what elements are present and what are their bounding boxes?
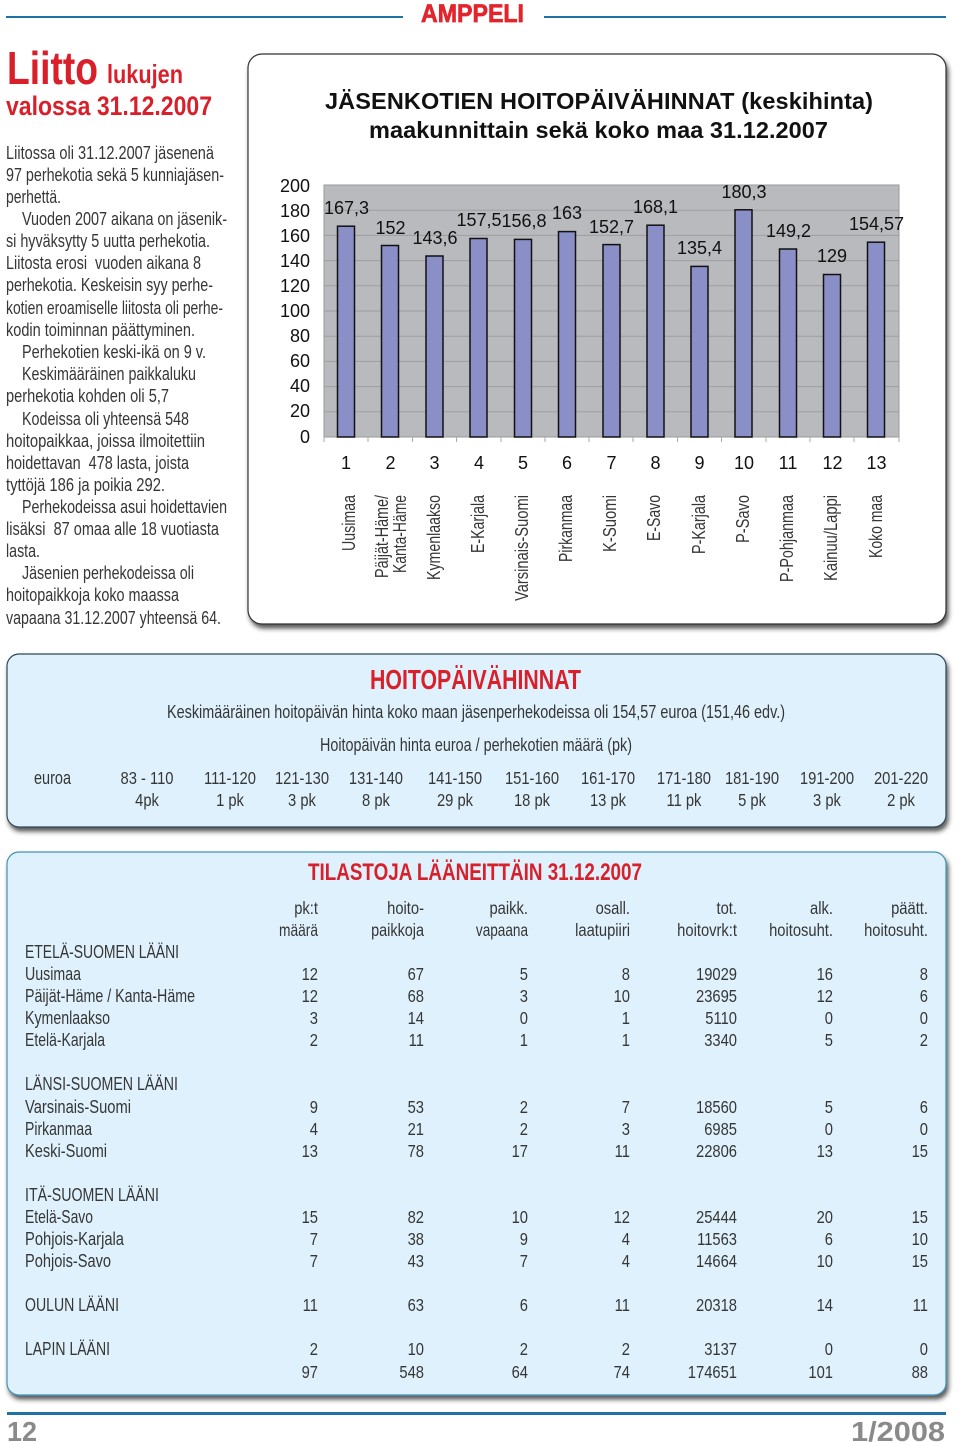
column: päätt. hoitosuht.: päätt. <box>891 899 928 918</box>
category numbers: 7 <box>606 453 617 473</box>
column: pk:t määrä: 4 <box>310 1120 318 1139</box>
column: alk. hoitosuht.: alk. <box>810 899 833 918</box>
column: paikk. vapaana: 6 <box>520 1296 528 1315</box>
column: paikk. vapaana: 7 <box>520 1252 528 1271</box>
region names: E-Savo <box>644 495 664 541</box>
text block: intro column <box>6 143 227 628</box>
column: paikk. vapaana: 5 <box>520 965 528 984</box>
y axis labels: 60 <box>290 351 310 371</box>
column: tot. hoitovrk:t: 14664 <box>696 1252 737 1271</box>
column: hoitopaikkoja: 43 <box>408 1252 424 1271</box>
column: tot. hoitovrk:t: 23695 <box>696 987 737 1006</box>
title: lukujen <box>107 59 183 89</box>
column: hoitopaikkoja: paikkoja <box>371 921 425 940</box>
column: tot. hoitovrk:t: 174651 <box>688 1363 737 1382</box>
column: alk. hoitosuht.: 20 <box>817 1208 833 1227</box>
column: paikk. vapaana: 2 <box>520 1340 528 1359</box>
text block: intro column: Kodeissa oli yhteensä 548 <box>22 409 189 429</box>
column: alk. hoitosuht.: 0 <box>825 1009 833 1028</box>
column: pk:t määrä: 15 <box>302 1208 318 1227</box>
column: alk. hoitosuht.: 13 <box>817 1142 833 1161</box>
column: paikk. vapaana: vapaana <box>476 921 529 940</box>
row labels: Pohjois-Karjala <box>25 1229 125 1249</box>
column: paikk. vapaana: 17 <box>512 1142 528 1161</box>
column: osall. laatupiiri: osall. <box>596 899 630 918</box>
value labels: 149,2 <box>766 221 811 241</box>
text block: intro column: perhekotia. Keskeisin syy perhe- <box>6 275 213 295</box>
price ranges: 4pk <box>135 791 160 810</box>
column: tot. hoitovrk:t: 3340 <box>704 1031 737 1050</box>
column: osall. laatupiiri: 7 <box>622 1098 630 1117</box>
column: hoitopaikkoja: hoito- <box>387 899 424 918</box>
column: päätt. hoitosuht.: 6 <box>920 1098 928 1117</box>
column: hoitopaikkoja: 82 <box>408 1208 424 1227</box>
column: osall. laatupiiri: 2 <box>622 1340 630 1359</box>
value labels: 168,1 <box>633 197 678 217</box>
value labels: 163 <box>552 203 582 223</box>
column: paikk. vapaana: 10 <box>512 1208 528 1227</box>
text block: intro column: Jäsenien perhekodeissa oli <box>22 563 194 583</box>
column: pk:t määrä: 7 <box>310 1230 318 1249</box>
text block: intro column: lisäksi 87 omaa alle 18 vuotiasta <box>6 519 220 539</box>
column: tot. hoitovrk:t: 11563 <box>697 1230 737 1249</box>
column: päätt. hoitosuht.: 6 <box>920 987 928 1006</box>
value labels <box>324 182 904 266</box>
column: alk. hoitosuht.: 5 <box>825 1031 833 1050</box>
text block: intro column: Vuoden 2007 aikana on jäsenik- <box>22 209 227 229</box>
y axis labels: 80 <box>290 326 310 346</box>
column: tot. hoitovrk:t: hoitovrk:t <box>677 921 737 940</box>
category numbers: 2 <box>385 453 396 473</box>
column: päätt. hoitosuht.: 10 <box>912 1230 928 1249</box>
price ranges: 181-190 <box>725 769 779 788</box>
row labels: Etelä-Karjala <box>25 1030 106 1050</box>
column: paikk. vapaana <box>476 899 529 1382</box>
column: osall. laatupiiri: 3 <box>622 1120 630 1139</box>
column: alk. hoitosuht.: 101 <box>808 1363 833 1382</box>
column: hoitopaikkoja: 68 <box>408 987 424 1006</box>
region names: Uusimaa <box>339 494 359 551</box>
price ranges: 13 pk <box>590 791 627 810</box>
category numbers: 4 <box>474 453 484 473</box>
y axis labels <box>280 176 310 447</box>
column: alk. hoitosuht.: 10 <box>817 1252 833 1271</box>
region names: Koko maa <box>866 494 886 558</box>
price ranges: 151-160 <box>505 769 559 788</box>
column: pk:t määrä: 13 <box>302 1142 318 1161</box>
category numbers: 5 <box>518 453 528 473</box>
column: pk:t määrä <box>279 899 319 1382</box>
column: paikk. vapaana: 1 <box>520 1031 528 1050</box>
column: hoitopaikkoja: 10 <box>408 1340 424 1359</box>
column: osall. laatupiiri: 4 <box>622 1252 630 1271</box>
column: tot. hoitovrk:t <box>677 899 737 1382</box>
text block: intro column: Liitosta erosi vuoden aikana 8 <box>6 253 201 273</box>
text block: intro column: perhekotia kohden oli 5,7 <box>6 386 169 406</box>
price ranges: 29 pk <box>437 791 474 810</box>
price ranges: 3 pk <box>288 791 317 810</box>
value labels: 154,57 <box>849 214 904 234</box>
price ranges: 161-170 <box>581 769 635 788</box>
column: alk. hoitosuht.: 0 <box>825 1340 833 1359</box>
y axis labels: 160 <box>280 226 310 246</box>
column: pk:t määrä: 12 <box>302 987 318 1006</box>
price ranges: 3 pk <box>813 791 842 810</box>
row labels: Kymenlaakso <box>25 1008 110 1028</box>
row labels: Etelä-Savo <box>25 1207 93 1227</box>
text block: intro column: hoitopaikkaa, joissa ilmoitettiin <box>6 431 205 451</box>
price ranges: 2 pk <box>887 791 916 810</box>
y axis labels: 20 <box>290 401 310 421</box>
value labels: 152 <box>375 218 406 238</box>
column: hoitopaikkoja: 78 <box>408 1142 424 1161</box>
text block: intro column: kodin toiminnan päättyminen. <box>6 320 195 340</box>
price ranges: 11 pk <box>666 791 702 810</box>
category numbers: 9 <box>694 453 705 473</box>
category numbers <box>341 453 887 473</box>
price ranges: 8 pk <box>362 791 391 810</box>
bar chart <box>280 176 904 601</box>
y axis labels: 200 <box>280 176 310 196</box>
column: paikk. vapaana: 2 <box>520 1120 528 1139</box>
title: valossa 31.12.2007 <box>6 91 212 121</box>
value labels: 152,7 <box>589 217 634 237</box>
panel: chart <box>248 54 946 624</box>
region names: E-Karjala <box>468 494 488 553</box>
column: osall. laatupiiri: 4 <box>622 1230 630 1249</box>
y axis labels: 180 <box>280 201 310 221</box>
column: hoitopaikkoja: 38 <box>408 1230 424 1249</box>
price ranges: 201-220 <box>874 769 928 788</box>
chart title: maakunnittain sekä koko maa 31.12.2007 <box>369 117 828 143</box>
column: osall. laatupiiri: 11 <box>615 1296 630 1315</box>
column: päätt. hoitosuht.: 2 <box>920 1031 928 1050</box>
column: pk:t määrä: 12 <box>302 965 318 984</box>
column: tot. hoitovrk:t: 20318 <box>696 1296 737 1315</box>
column: hoitopaikkoja: 11 <box>409 1031 424 1050</box>
column: alk. hoitosuht.: hoitosuht. <box>769 921 833 940</box>
row labels: ETELÄ-SUOMEN LÄÄNI <box>25 942 179 962</box>
row labels: Päijät-Häme / Kanta-Häme <box>25 986 195 1006</box>
column: tot. hoitovrk:t: 5110 <box>705 1009 737 1028</box>
text block: intro column: 97 perhekotia sekä 5 kunniajäsen- <box>6 165 224 185</box>
text block: intro column: Perhekodeissa asui hoidettavien <box>22 497 227 517</box>
row labels: Uusimaa <box>25 964 82 984</box>
column: paikk. vapaana: 64 <box>512 1363 528 1382</box>
text block: intro column: hoidettavan 478 lasta, joista <box>6 453 190 473</box>
value labels: 167,3 <box>324 198 369 218</box>
column: alk. hoitosuht.: 5 <box>825 1098 833 1117</box>
y axis labels: 100 <box>280 301 310 321</box>
text block: intro column: tyttöjä 186 ja poikia 292. <box>6 475 165 495</box>
column: osall. laatupiiri: 1 <box>622 1031 630 1050</box>
column: päätt. hoitosuht.: 15 <box>912 1142 928 1161</box>
chart title <box>325 88 873 143</box>
column: päätt. hoitosuht.: 15 <box>912 1252 928 1271</box>
column: päätt. hoitosuht. <box>864 899 928 1382</box>
column: pk:t määrä: pk:t <box>294 899 318 918</box>
column: alk. hoitosuht.: 16 <box>817 965 833 984</box>
column: tot. hoitovrk:t: 18560 <box>696 1098 737 1117</box>
summary text: Hoitopäivän hinta euroa / perhekotien määrä (pk) <box>320 735 632 755</box>
region names: Varsinais-Suomi <box>512 495 532 601</box>
row labels: LAPIN LÄÄNI <box>25 1339 110 1359</box>
category numbers: 12 <box>822 453 843 473</box>
heading: HOITOPÄIVÄHINNAT <box>370 664 581 695</box>
summary text <box>167 702 785 755</box>
text block: intro column: perhettä. <box>6 187 61 207</box>
value labels: 180,3 <box>721 182 767 202</box>
column: tot. hoitovrk:t: 22806 <box>696 1142 737 1161</box>
column: päätt. hoitosuht.: hoitosuht. <box>864 921 928 940</box>
column: pk:t määrä: 9 <box>310 1098 318 1117</box>
price ranges: 141-150 <box>428 769 482 788</box>
logo: Ampeli: AMPPELI <box>421 0 524 28</box>
region names: P-Pohjanmaa <box>777 494 797 582</box>
panel: hoitopäivähinnat <box>7 654 946 827</box>
category numbers: 11 <box>779 453 797 473</box>
value labels: 129 <box>817 246 847 266</box>
text block: intro column: lasta. <box>6 541 40 561</box>
heading: TILASTOJA LÄÄNEITTÄIN 31.12.2007 <box>308 859 642 886</box>
column: päätt. hoitosuht.: 0 <box>920 1009 928 1028</box>
y axis labels: 140 <box>280 251 310 271</box>
column: hoitopaikkoja: 53 <box>408 1098 424 1117</box>
title: Liitto <box>7 42 98 94</box>
column: pk:t määrä: määrä <box>279 921 319 940</box>
column: osall. laatupiiri: 1 <box>622 1009 630 1028</box>
value labels: 156,8 <box>501 211 547 231</box>
column: hoitopaikkoja: 67 <box>408 965 424 984</box>
column: päätt. hoitosuht.: 0 <box>920 1120 928 1139</box>
region names: Kymenlaakso <box>424 495 444 580</box>
y axis labels: 120 <box>280 276 310 296</box>
price ranges: 131-140 <box>349 769 403 788</box>
column: päätt. hoitosuht.: 8 <box>920 965 928 984</box>
column: pk:t määrä: 2 <box>310 1340 318 1359</box>
column: alk. hoitosuht.: 6 <box>825 1230 833 1249</box>
column: paikk. vapaana: 9 <box>520 1230 528 1249</box>
price ranges: 5 pk <box>738 791 767 810</box>
price ranges: 191-200 <box>800 769 854 788</box>
summary text: Keskimääräinen hoitopäivän hinta koko maan jäsenperhekodeissa oli 154,57 euroa (151,46 edv.) <box>167 702 785 722</box>
category numbers: 3 <box>429 453 440 473</box>
category numbers: 8 <box>650 453 661 473</box>
row labels: LÄNSI-SUOMEN LÄÄNI <box>25 1074 178 1094</box>
row labels: Pohjois-Savo <box>25 1251 111 1271</box>
column: pk:t määrä: 2 <box>310 1031 318 1050</box>
text block: intro column: hoitopaikkoja koko maassa <box>6 585 180 605</box>
panel: tilastoja lääneittäin <box>7 852 946 1395</box>
column: pk:t määrä: 3 <box>310 1009 318 1028</box>
column: osall. laatupiiri: 10 <box>614 987 630 1006</box>
chart title: JÄSENKOTIEN HOITOPÄIVÄHINNAT (keskihinta) <box>325 88 873 114</box>
region names <box>339 494 886 601</box>
row labels: Pirkanmaa <box>25 1119 93 1139</box>
column: paikk. vapaana: 0 <box>520 1009 528 1028</box>
column: päätt. hoitosuht.: 88 <box>912 1363 928 1382</box>
text block: intro column: Keskimääräinen paikkaluku <box>22 364 196 384</box>
y axis labels: 40 <box>290 376 310 396</box>
region names: Kainuu/Lappi <box>821 495 841 581</box>
bars <box>338 210 884 437</box>
column: osall. laatupiiri <box>575 899 630 1382</box>
column: tot. hoitovrk:t: 19029 <box>696 965 737 984</box>
column: päätt. hoitosuht.: 15 <box>912 1208 928 1227</box>
row labels: ITÄ-SUOMEN LÄÄNI <box>25 1185 159 1205</box>
category numbers: 10 <box>734 453 754 473</box>
value labels: 157,5 <box>456 210 502 230</box>
y axis labels: 0 <box>300 427 310 447</box>
column: hoitopaikkoja: 14 <box>408 1009 424 1028</box>
column: osall. laatupiiri: 8 <box>622 965 630 984</box>
column: paikk. vapaana: 2 <box>520 1098 528 1117</box>
text block: intro column: Liitossa oli 31.12.2007 jäsenenä <box>6 143 215 163</box>
region names: Pirkanmaa <box>556 494 576 562</box>
column: alk. hoitosuht.: 0 <box>825 1120 833 1139</box>
price ranges: 83 - 110 <box>121 769 174 788</box>
column: paikk. vapaana: 3 <box>520 987 528 1006</box>
column: osall. laatupiiri: laatupiiri <box>575 921 630 940</box>
column: pk:t määrä: 97 <box>302 1363 318 1382</box>
row labels: Varsinais-Suomi <box>25 1097 131 1117</box>
region names: P-Karjala <box>689 494 709 554</box>
column: alk. hoitosuht.: 12 <box>817 987 833 1006</box>
row labels: OULUN LÄÄNI <box>25 1295 119 1315</box>
price ranges: 18 pk <box>514 791 551 810</box>
row labels: Keski-Suomi <box>25 1141 107 1161</box>
column: päätt. hoitosuht.: 0 <box>920 1340 928 1359</box>
footer <box>7 1412 946 1442</box>
price ranges: euroa <box>34 768 72 788</box>
category numbers: 1 <box>341 453 351 473</box>
price ranges <box>34 768 928 810</box>
column: tot. hoitovrk:t: 25444 <box>696 1208 737 1227</box>
column: osall. laatupiiri: 74 <box>614 1363 630 1382</box>
column: tot. hoitovrk:t: 6985 <box>704 1120 737 1139</box>
column: tot. hoitovrk:t: tot. <box>717 899 737 918</box>
column: alk. hoitosuht. <box>769 899 833 1382</box>
column: hoitopaikkoja <box>371 899 425 1382</box>
category numbers: 6 <box>562 453 572 473</box>
text block: intro column: vapaana 31.12.2007 yhteensä 64. <box>6 608 221 628</box>
region names: Kanta-Häme <box>390 495 410 573</box>
column: hoitopaikkoja: 548 <box>399 1363 424 1382</box>
value labels: 135,4 <box>677 238 722 258</box>
price ranges: 1 pk <box>216 791 245 810</box>
column: hoitopaikkoja: 21 <box>408 1120 424 1139</box>
price ranges: 121-130 <box>275 769 329 788</box>
region names: P-Savo <box>733 495 753 543</box>
region names: K-Suomi <box>600 495 620 552</box>
text block: intro column: kotien eroamiselle liitosta oli perhe- <box>6 298 223 318</box>
value labels: 143,6 <box>412 228 458 248</box>
column: päätt. hoitosuht.: 11 <box>913 1296 928 1315</box>
column: pk:t määrä: 11 <box>303 1296 318 1315</box>
column: pk:t määrä: 7 <box>310 1252 318 1271</box>
region names: Päijät-Häme/ <box>372 495 392 578</box>
column: tot. hoitovrk:t: 3137 <box>704 1340 737 1359</box>
row labels <box>25 942 195 1359</box>
category numbers: 13 <box>866 453 887 473</box>
column: alk. hoitosuht.: 14 <box>817 1296 833 1315</box>
column: hoitopaikkoja: 63 <box>408 1296 424 1315</box>
price ranges: 171-180 <box>657 769 711 788</box>
title <box>6 42 212 121</box>
column: paikk. vapaana: paikk. <box>489 899 528 918</box>
price ranges: 111-120 <box>204 769 256 788</box>
column: osall. laatupiiri: 12 <box>614 1208 630 1227</box>
column: osall. laatupiiri: 11 <box>615 1142 630 1161</box>
text block: intro column: si hyväksytty 5 uutta perhekotia. <box>6 231 210 251</box>
text block: intro column: Perhekotien keski-ikä on 9 v. <box>22 342 206 362</box>
